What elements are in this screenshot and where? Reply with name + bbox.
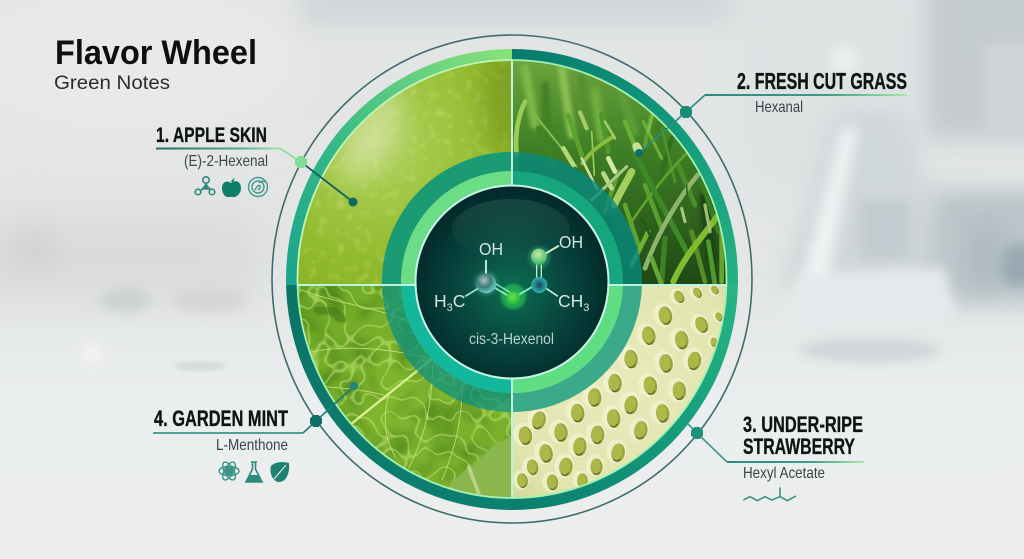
icon: leaf [270,462,289,482]
grass wedge outer band [512,49,738,285]
heading: apple skin: 1. APPLE SKIN [156,123,267,147]
mint wedge outer band [286,285,512,510]
hub disc [416,186,608,378]
icon row: molecule, apple, spiral [195,177,268,197]
heading: fresh cut grass: 2. FRESH CUT GRASS [737,68,907,94]
wedge 3: under-ripe strawberry [512,285,738,510]
compound: hexanal: Hexanal [755,99,803,116]
icon: atom [219,460,239,482]
apple wedge outer band [286,49,512,285]
atom labels: OH [559,232,583,252]
heading: under-ripe strawberry [743,412,863,459]
atom labels [434,232,589,314]
icon: spiral [248,178,268,196]
subheading: Green Notes [54,72,170,94]
grass texture [510,55,735,290]
icon: skeletal formula [743,487,796,501]
main heading: Flavor Wheel [55,34,257,72]
hub glass highlight [452,199,570,261]
compound: l-menthone: L-Menthone [216,437,288,454]
callout 1: apple skin [156,123,358,206]
center hub: cis-3-Hexenol molecule [416,186,608,378]
callout 4: garden mint [153,382,358,482]
atom labels: CH [558,291,583,311]
heading: under-ripe strawberry: STRAWBERRY [743,434,855,459]
atom labels: H [434,291,447,311]
compound: hexenal: (E)-2-Hexenal [184,153,268,170]
atom labels: C [453,291,465,311]
wedge 2: fresh cut grass [512,49,738,285]
atom labels: 3 [583,302,589,314]
icon row: atom, flask, leaf [219,460,289,482]
molecule bonds and atoms [466,246,558,309]
atom labels: 3 [447,302,453,314]
mint leaf texture [298,286,511,498]
apple skin texture [298,60,511,284]
leader line to strawberry wedge [688,424,864,463]
leader line to apple wedge [156,148,358,206]
callout 3: under-ripe strawberry [688,412,864,501]
callout 2: fresh cut grass [635,68,907,157]
leader line to mint wedge [153,382,358,433]
strawberry texture [513,286,726,498]
atom labels: OH [479,239,503,259]
middle ring segments [392,162,632,402]
strawberry wedge outer band [512,285,738,510]
wedge 1: apple skin [286,49,512,285]
leader line to grass wedge [635,94,907,157]
wedge 4: garden mint [286,285,512,510]
icon: flask [246,462,262,482]
heading: under-ripe strawberry: 3. UNDER-RIPE [743,412,863,437]
heading: garden mint: 4. GARDEN MINT [154,406,288,431]
hub label: cis-3-Hexenol [469,331,554,348]
title [54,34,257,94]
wedge dividers [297,60,727,498]
compound: hexyl acetate: Hexyl Acetate [743,465,825,482]
icon: molecule [195,177,215,195]
flavor wheel [272,35,752,523]
outer thin ring [272,35,752,523]
icon: apple [222,178,241,197]
